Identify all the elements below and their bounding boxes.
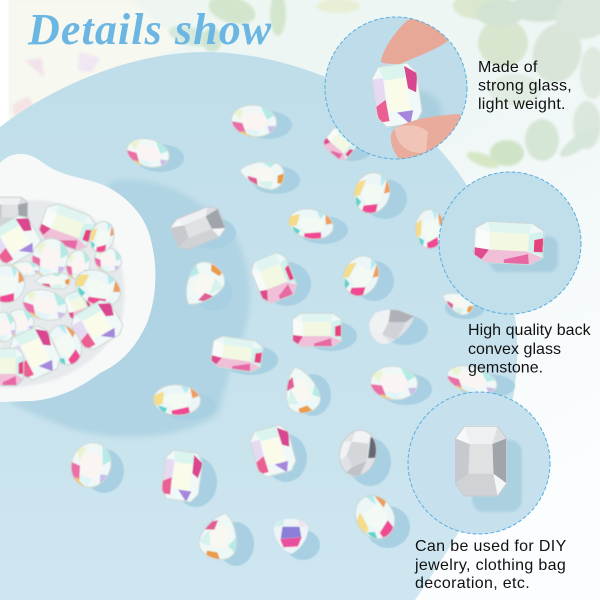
callout circle: silver back of gem — [408, 392, 550, 534]
callout circle: front of gem — [439, 172, 581, 314]
title: Details show — [27, 5, 272, 54]
text: high quality: High quality back — [468, 322, 592, 339]
white left margin — [0, 0, 9, 130]
text: made of strong glass: light weight. — [478, 96, 566, 113]
blue surface — [0, 52, 517, 600]
text: made of strong glass: strong glass, — [478, 78, 572, 94]
text: uses: jewelry, clothing bag — [414, 557, 566, 574]
gem shadows on surface — [84, 111, 515, 566]
bowl — [0, 154, 155, 402]
callout circle: glass pinched in fingers — [325, 17, 470, 160]
text: uses: Can be used for DIY — [415, 538, 567, 555]
gem pile in bowl — [0, 197, 127, 386]
top finger — [381, 18, 448, 64]
text: uses: decoration, etc. — [415, 575, 530, 592]
bottom finger — [390, 114, 461, 159]
text: high quality: convex glass — [468, 341, 561, 358]
loose gems — [64, 103, 501, 566]
bowl shadow — [10, 180, 250, 437]
text: made of strong glass: Made of — [478, 59, 538, 76]
text: high quality: gemstone. — [468, 360, 543, 376]
foliage — [166, 0, 600, 171]
faded bowl behind title — [9, 0, 185, 120]
